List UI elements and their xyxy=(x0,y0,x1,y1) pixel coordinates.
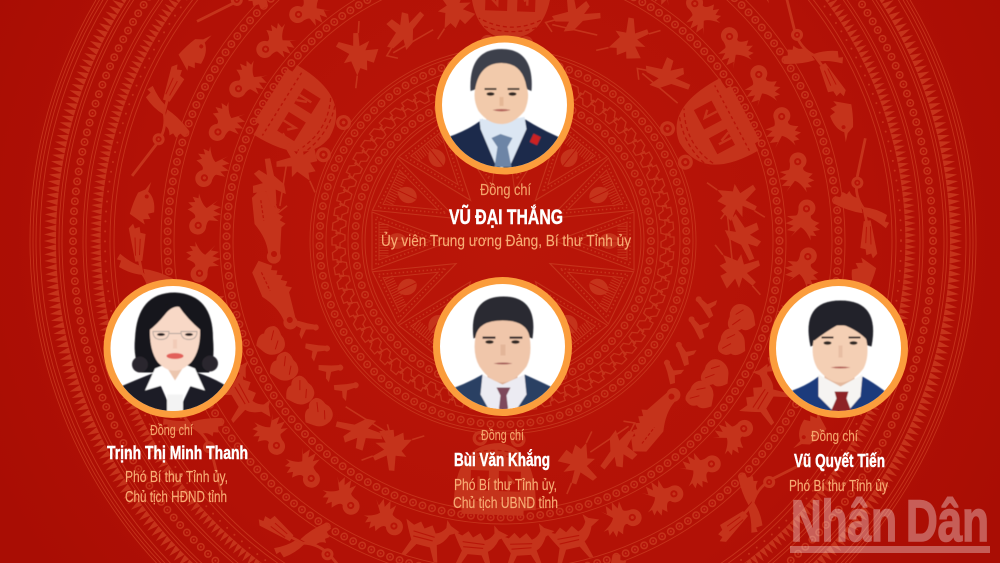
text: Bùi Văn Khắng: Phó Bí thư Tỉnh ủy, xyxy=(454,477,557,494)
text: Vũ Đại Thắng xyxy=(381,182,631,250)
portrait: Vũ Đại Thắng xyxy=(435,36,574,174)
text: Trịnh Thị Minh Thanh: Chủ tịch HĐND tỉnh xyxy=(125,489,227,506)
text: Trịnh Thị Minh Thanh: Trịnh Thị Minh Thanh xyxy=(107,443,248,463)
portrait: Trịnh Thị Minh Thanh xyxy=(104,279,242,418)
text: Trịnh Thị Minh Thanh xyxy=(107,423,248,506)
text: Bùi Văn Khắng: Chủ tịch UBND tỉnh xyxy=(453,495,558,512)
text: Vũ Đại Thắng: Ủy viên Trung ương Đảng, Bí thư Tỉnh ủy xyxy=(381,231,631,250)
text: Vũ Quyết Tiến xyxy=(789,429,888,495)
portrait: Bùi Văn Khắng xyxy=(433,277,572,416)
watermark: Nhân Dân logo: Nhân xyxy=(791,489,897,554)
text: Vũ Đại Thắng: VŨ ĐẠI THẮNG xyxy=(449,205,563,229)
text: Vũ Đại Thắng: Đồng chí xyxy=(480,182,532,199)
text: Vũ Quyết Tiến: Phó Bí thư Tỉnh ủy xyxy=(789,478,888,495)
text: Trịnh Thị Minh Thanh: Phó Bí thư Tỉnh ủy, xyxy=(125,469,228,486)
text: Bùi Văn Khắng: Bùi Văn Khắng xyxy=(454,449,550,470)
portrait: Vũ Quyết Tiến xyxy=(769,279,908,418)
text: Trịnh Thị Minh Thanh: Đồng chí xyxy=(150,423,193,439)
text: Vũ Quyết Tiến: Đồng chí xyxy=(811,429,858,445)
text: Vũ Quyết Tiến: Vũ Quyết Tiến xyxy=(794,451,885,471)
text: Bùi Văn Khắng: Đồng chí xyxy=(481,428,524,444)
text: Bùi Văn Khắng xyxy=(453,428,558,512)
